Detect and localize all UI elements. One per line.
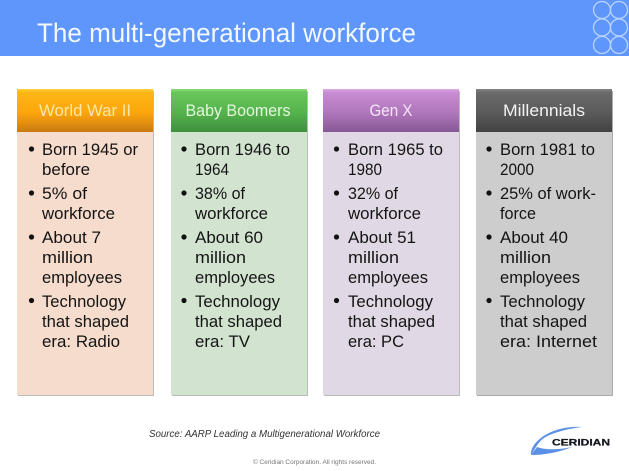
list: Baby Boomers facts: Technology bbox=[195, 293, 281, 311]
list: World War II facts: million bbox=[42, 249, 93, 267]
list: Gen X facts: million bbox=[348, 249, 399, 267]
list: World War II facts: 5% of bbox=[42, 185, 87, 203]
list: Millennials facts: About 40 bbox=[500, 229, 568, 247]
list: Gen X facts: employees bbox=[348, 269, 428, 287]
list: Gen X facts: 32% of bbox=[348, 185, 398, 203]
list: Millennials facts: Technology bbox=[500, 293, 586, 311]
header: World War II: World War II bbox=[39, 101, 131, 120]
list: Millennials facts: employees bbox=[500, 269, 580, 287]
logo: Ceridian bbox=[531, 427, 610, 455]
list: Millennials facts: 25% of work- bbox=[500, 185, 596, 203]
list: World War II facts: that shaped bbox=[42, 313, 129, 331]
list: World War II facts: employees bbox=[42, 269, 122, 287]
list: Baby Boomers facts: About 60 bbox=[195, 229, 263, 247]
list: Gen X facts: Born 1965 to bbox=[348, 141, 443, 159]
icon: decorative circles bbox=[594, 2, 628, 54]
title: The multi-generational workforce bbox=[37, 18, 416, 48]
list: Baby Boomers facts: era: TV bbox=[195, 333, 250, 351]
panel: Baby Boomers bbox=[171, 89, 308, 396]
list: Baby Boomers facts: that shaped bbox=[195, 313, 282, 331]
list: Gen X facts: 1980 bbox=[348, 161, 382, 179]
header: Gen X bbox=[323, 89, 459, 132]
list: Millennials facts: that shaped bbox=[500, 313, 587, 331]
logo: Ceridian: CERIDIAN bbox=[552, 438, 610, 448]
title banner bbox=[0, 0, 629, 56]
panel: Gen X bbox=[323, 89, 460, 396]
list: Gen X facts: era: PC bbox=[348, 333, 404, 351]
list: Gen X facts bbox=[334, 141, 443, 351]
list: Baby Boomers facts: Born 1946 to bbox=[195, 141, 290, 159]
list: Baby Boomers facts: 38% of bbox=[195, 185, 245, 203]
list: Baby Boomers facts bbox=[181, 141, 290, 351]
list: Gen X facts: About 51 bbox=[348, 229, 416, 247]
header: Baby Boomers: Baby Boomers bbox=[186, 101, 290, 120]
list: Baby Boomers facts: workforce bbox=[194, 205, 268, 223]
list: Millennials facts bbox=[486, 141, 597, 351]
list: Millennials facts: million bbox=[500, 249, 551, 267]
source note: Source: AARP Leading a Multigenerational Workforce bbox=[149, 429, 380, 440]
list: Millennials facts: Born 1981 to bbox=[500, 141, 595, 159]
list: World War II facts: Born 1945 or bbox=[42, 141, 139, 159]
header: World War II bbox=[17, 89, 153, 132]
panel: Millennials bbox=[476, 89, 613, 396]
header: Millennials: Millennials bbox=[503, 101, 585, 120]
list: Gen X facts: workforce bbox=[347, 205, 421, 223]
copyright: © Ceridian Corporation. All rights reserved. bbox=[253, 458, 376, 466]
list: Gen X facts: Technology bbox=[348, 293, 434, 311]
header: Gen X: Gen X bbox=[370, 101, 412, 120]
list: World War II facts: Technology bbox=[42, 293, 127, 311]
list: Millennials facts: force bbox=[500, 205, 536, 223]
list: Gen X facts: that shaped bbox=[348, 313, 435, 331]
list: Baby Boomers facts: employees bbox=[195, 269, 275, 287]
list: Baby Boomers facts: million bbox=[195, 249, 246, 267]
list: Baby Boomers facts: 1964 bbox=[195, 161, 229, 179]
list: World War II facts: About 7 bbox=[42, 229, 101, 247]
list: World War II facts: workforce bbox=[41, 205, 115, 223]
panel: World War II bbox=[17, 89, 154, 396]
list: Millennials facts: era: Internet bbox=[500, 333, 597, 351]
list: World War II facts: before bbox=[42, 161, 90, 179]
header: Baby Boomers bbox=[171, 89, 307, 132]
header: Millennials bbox=[476, 89, 612, 132]
list: Millennials facts: 2000 bbox=[500, 161, 534, 179]
list: World War II facts bbox=[29, 141, 139, 351]
list: World War II facts: era: Radio bbox=[42, 333, 120, 351]
